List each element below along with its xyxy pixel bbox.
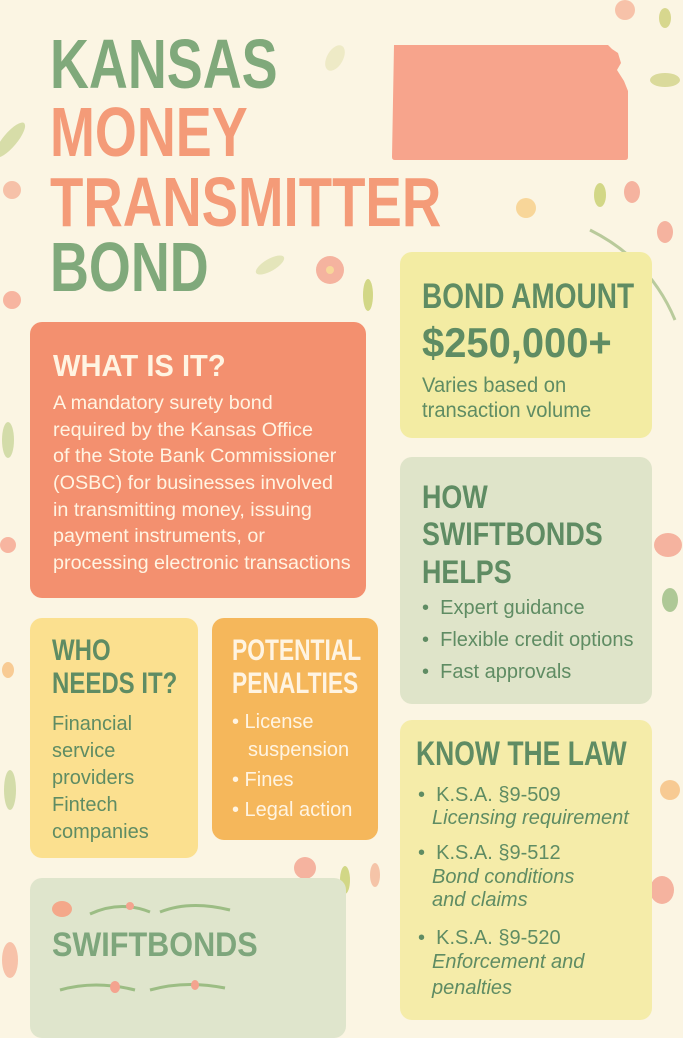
title: MONEY	[50, 93, 248, 171]
title	[50, 25, 441, 306]
panel: know the law: penalties	[432, 977, 512, 999]
panel: how swiftbonds helps: • Fast approvals	[422, 661, 571, 683]
panel: who needs it: NEEDS IT?	[52, 667, 177, 700]
panel: know the law: • K.S.A. §9-520	[418, 927, 561, 949]
panel: know the law: • K.S.A. §9-512	[418, 842, 561, 864]
panel: how swiftbonds helps: • Flexible credit options	[422, 629, 634, 651]
panel: who needs it	[30, 618, 198, 858]
panel: potential penalties: POTENTIAL	[232, 634, 361, 667]
panel: potential penalties: • Fines	[232, 769, 293, 791]
panel: what is it	[30, 322, 366, 598]
panel: who needs it: Fintech	[52, 794, 118, 816]
panel: know the law: • K.S.A. §9-509	[418, 784, 561, 806]
panel: what is it: WHAT IS IT?	[53, 348, 226, 383]
panel: bond amount: transaction volume	[422, 399, 591, 422]
icon: Kansas map	[392, 45, 628, 160]
panel: know the law: KNOW THE LAW	[416, 735, 627, 773]
title: BOND	[50, 228, 209, 306]
panel: how swiftbonds helps: HELPS	[422, 554, 512, 590]
panel: who needs it: WHO	[52, 634, 111, 667]
panel: potential penalties: • Legal action	[232, 799, 352, 821]
panel: bond amount	[400, 252, 652, 438]
panel: what is it: in transmitting money, issuing	[53, 500, 312, 521]
panel: potential penalties: • License	[232, 711, 314, 733]
panel: potential penalties	[212, 618, 378, 840]
panel: potential penalties: PENALTIES	[232, 667, 358, 700]
panel: bond amount: Varies based on	[422, 374, 566, 397]
panel: what is it: processing electronic transactions	[53, 553, 351, 574]
panel: what is it: A mandatory surety bond	[53, 393, 273, 414]
panel: how swiftbonds helps: SWIFTBONDS	[422, 516, 603, 552]
panel: swiftbonds logo: SWIFTBONDS	[52, 926, 258, 964]
panel: what is it: of the Stote Bank Commissioner	[53, 446, 336, 467]
panel: who needs it: companies	[52, 821, 149, 843]
panel: how swiftbonds helps: HOW	[422, 479, 488, 515]
title: TRANSMITTER	[50, 163, 441, 241]
panel: know the law: Bond conditions	[432, 866, 574, 888]
panel: what is it: required by the Kansas Office	[53, 420, 313, 441]
panel: know the law	[400, 720, 652, 1020]
panel: how swiftbonds helps: • Expert guidance	[422, 597, 585, 619]
panel: what is it: (OSBC) for businesses involved	[53, 473, 333, 494]
panel: bond amount: $250,000+	[422, 319, 612, 366]
panel: know the law: and claims	[432, 889, 528, 911]
icon: top sprigs	[52, 901, 230, 917]
panel: who needs it: providers	[52, 767, 134, 789]
panel: who needs it: service	[52, 740, 115, 762]
title: KANSAS	[50, 25, 278, 103]
panel: who needs it: Financial	[52, 713, 132, 735]
panel: know the law: Enforcement and	[432, 951, 584, 973]
panel: know the law: Licensing requirement	[432, 807, 629, 829]
panel: how swiftbonds helps	[400, 457, 652, 704]
panel: what is it: payment instruments, or	[53, 526, 265, 547]
panel: potential penalties: suspension	[248, 739, 349, 761]
panel: swiftbonds logo	[30, 878, 346, 1038]
panel: bond amount: BOND AMOUNT	[422, 277, 634, 316]
icon: bottom sprigs	[60, 980, 226, 993]
